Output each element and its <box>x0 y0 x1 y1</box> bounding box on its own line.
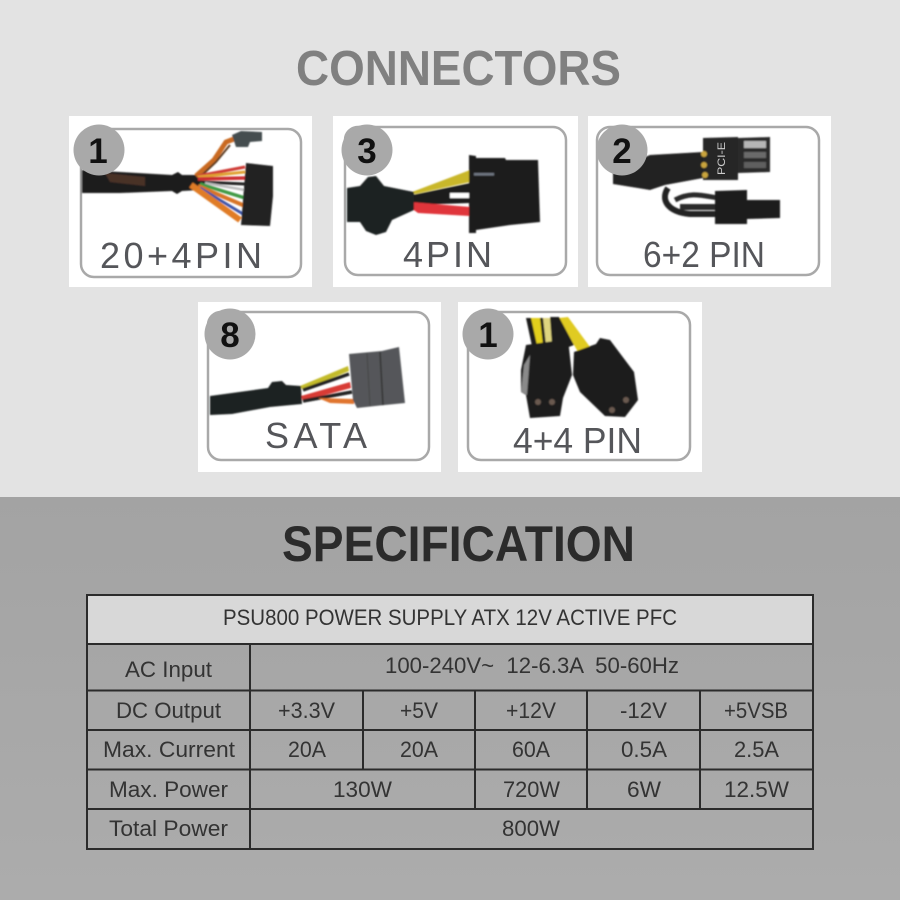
badge: quantity 8 <box>204 308 256 360</box>
row: DC output <box>116 698 788 723</box>
row: total power: 800W <box>502 816 560 841</box>
icon: 20+4 pin cable <box>82 131 273 226</box>
row: max power <box>109 777 789 802</box>
connector marking: PCI-E: PCI-E <box>716 142 728 175</box>
row: max current: Max. Current <box>103 737 235 762</box>
row: DC output: +3.3V <box>278 698 335 723</box>
label: 4+4 PIN: 4+4 PIN <box>513 420 642 461</box>
badge: quantity 3 <box>342 124 392 176</box>
row: DC output: -12V <box>620 698 667 723</box>
panel: 20+4 pin connector <box>69 116 312 287</box>
row: DC output: +5VSB <box>724 698 788 723</box>
label: 6+2 PIN: 6+2 PIN <box>643 234 765 275</box>
row: max current: 2.5A <box>734 737 779 762</box>
row: max power: 12.5W <box>724 777 789 802</box>
icon: 4 pin cable <box>347 155 540 235</box>
badge: quantity 8: 8 <box>220 316 240 355</box>
icon: SATA cable <box>210 347 405 415</box>
row: max current: 0.5A <box>621 737 667 762</box>
row: DC output: DC Output <box>116 698 221 723</box>
badge: quantity 2: 2 <box>612 132 632 171</box>
panel: 6+2 pin connector <box>588 116 831 287</box>
row: max power: 720W <box>503 777 560 802</box>
badge: quantity 2 <box>596 124 648 176</box>
table header <box>87 595 813 644</box>
badge: quantity 3: 3 <box>357 132 377 171</box>
panel: 4 pin connector <box>333 116 578 287</box>
specification section background <box>0 497 900 900</box>
label: 20+4PIN: 20+4PIN <box>100 235 262 276</box>
badge: quantity 1 <box>74 124 124 176</box>
badge: quantity 1 <box>462 308 514 360</box>
row: max power: 6W <box>627 777 661 802</box>
row: DC output: +5V <box>400 698 438 723</box>
heading: specification: SPECIFICATION <box>282 516 635 572</box>
badge: quantity 1: 1 <box>478 316 498 355</box>
row: max power: 130W <box>333 777 392 802</box>
row: max current: 20A <box>400 737 438 762</box>
label: 4PIN: 4PIN <box>403 234 492 275</box>
row: max power: Max. Power <box>109 777 228 802</box>
row: DC output: +12V <box>506 698 556 723</box>
row: max current <box>103 737 779 762</box>
icon: 4+4 pin cable <box>521 317 638 418</box>
row: AC input: AC Input <box>125 657 212 682</box>
panel: SATA connector <box>198 302 441 472</box>
icon: 6+2 pin cable <box>613 137 780 224</box>
specification table <box>87 595 813 849</box>
row: total power <box>109 816 560 841</box>
heading: connectors: CONNECTORS <box>296 42 621 96</box>
panel: 4+4 pin connector <box>458 302 702 472</box>
label: SATA: SATA <box>265 415 367 456</box>
row: total power: Total Power <box>109 816 228 841</box>
badge: quantity 1: 1 <box>88 132 108 171</box>
row: AC input: 100-240V~ 12-6.3A 50-60Hz <box>385 653 679 678</box>
table header: PSU800 POWER SUPPLY ATX 12V ACTIVE PFC <box>223 605 677 630</box>
row: max current: 20A <box>288 737 326 762</box>
row: max current: 60A <box>512 737 550 762</box>
row: AC input <box>125 653 679 682</box>
connectors section background <box>0 0 900 497</box>
